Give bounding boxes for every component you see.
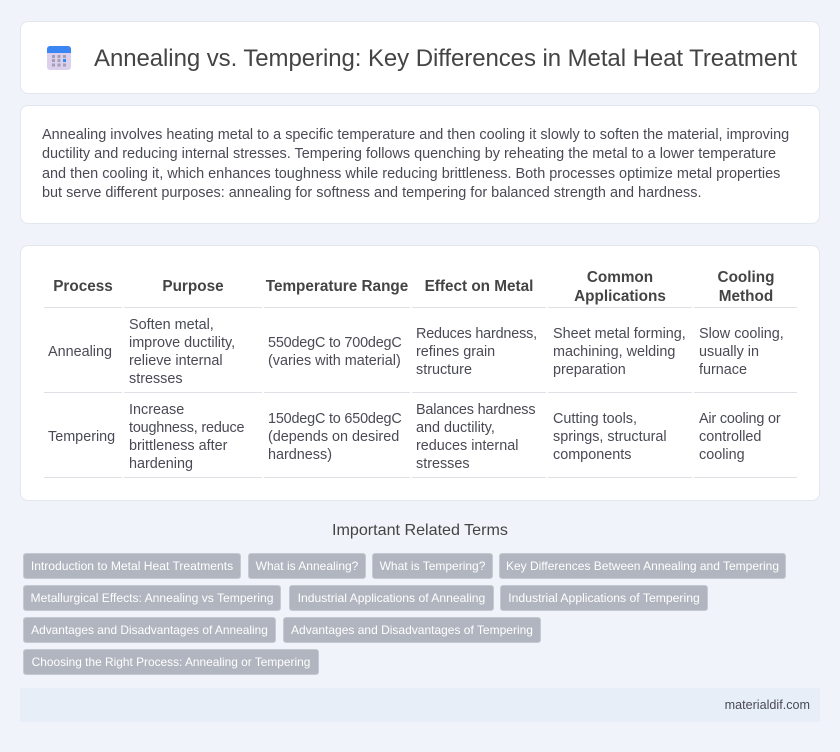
row: tempering [48,402,780,472]
row: tempering: Air cooling or [699,411,780,427]
comparison table card [20,245,820,501]
row: annealing [48,317,784,387]
footer bar [20,688,820,722]
related term tags: Industrial Applications of Tempering [508,591,700,605]
table header: Common [587,269,653,286]
row: tempering: Increase [129,402,184,418]
row: annealing: Annealing [48,344,112,360]
table header: Cooling [718,269,774,286]
table header: Purpose [162,278,224,295]
row: annealing: Slow cooling, [699,326,784,342]
table header: Effect on Metal [425,278,533,295]
row: tempering: reduces internal [416,438,518,454]
title: Annealing vs. Tempering: Key Differences in Metal Heat Treatment [94,45,797,72]
related term tags: What is Tempering? [380,559,485,573]
related terms heading: Important Related Terms [332,521,508,539]
related term tags: Key Differences Between Annealing and Tempering [506,559,779,573]
row: tempering: springs, structural [553,429,667,445]
row: tempering: cooling [699,447,745,463]
row: annealing: (varies with material) [268,353,401,369]
row: annealing: refines grain [416,344,495,360]
row: tempering: stresses [416,456,470,472]
related term tags: Advantages and Disadvantages of Tempering [291,623,533,637]
table header: Method [719,288,773,305]
related term tags: Introduction to Metal Heat Treatments [31,559,233,573]
row: tempering: and ductility, [416,420,495,436]
row: tempering: (depends on desired [268,429,399,445]
icon: calendar [47,46,71,70]
row: tempering: 150degC to 650degC [268,411,402,427]
related term tags: Choosing the Right Process: Annealing or Tempering [32,655,310,669]
row: tempering: hardness) [268,447,332,463]
header card [20,21,820,94]
intro paragraph: but serve different purposes: annealing for softness and tempering for balanced strength and hardness. [42,185,701,201]
row: tempering: controlled [699,429,761,445]
intro paragraph: Annealing involves heating metal to a specific temperature and then cooling it slowly to soften the material, improving [42,127,789,143]
row: annealing: 550degC to 700degC [268,335,402,351]
row: annealing: Reduces hardness, [416,326,537,342]
related term tags [23,553,786,675]
row: annealing: stresses [129,371,183,387]
footer site name: materialdif.com [725,698,810,712]
table header: Temperature Range [266,278,408,295]
row: tempering: Balances hardness [416,402,535,418]
row: annealing: machining, welding [553,344,675,360]
row: annealing: Soften metal, [129,317,214,333]
intro paragraph: ductility and reducing internal stresses. Tempering follows quenching by reheating the metal to a lower temperature [42,146,776,162]
related term tags: What is Annealing? [256,559,358,573]
intro paragraph: and then cooling it, which enhances toughness while reducing brittleness. Both processes optimize metal properties [42,166,780,182]
row: annealing: Sheet metal forming, [553,326,686,342]
row: tempering: Tempering [48,429,115,445]
row: annealing: improve ductility, [129,335,235,351]
row: tempering: brittleness after [129,438,227,454]
row: tempering: toughness, reduce [129,420,244,436]
row: annealing: structure [416,362,472,378]
related term tags: Metallurgical Effects: Annealing vs Tempering [31,591,273,605]
related term tags: Advantages and Disadvantages of Annealing [31,623,268,637]
table header: Process [53,278,113,295]
table header: Applications [574,288,666,305]
intro text card [20,105,820,224]
row: tempering: components [553,447,631,463]
related term tags: Industrial Applications of Annealing [298,591,485,605]
row: annealing: preparation [553,362,626,378]
row: annealing: usually in [699,344,759,360]
table header [53,269,774,305]
row: annealing: relieve internal [129,353,223,369]
row: tempering: Cutting tools, [553,411,637,427]
intro paragraph [42,127,789,201]
row: tempering: hardening [129,456,193,472]
row: annealing: furnace [699,362,747,378]
